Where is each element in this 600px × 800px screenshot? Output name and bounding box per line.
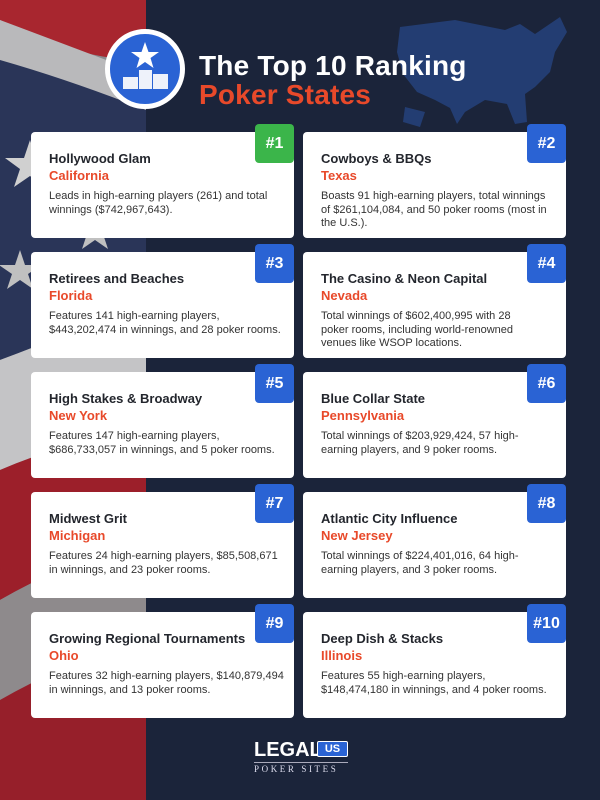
card 2: Texas: [321, 168, 357, 183]
title: The Top 10 Ranking: [199, 50, 467, 81]
card 5: $686,733,057 in winnings, and 5 poker rooms.: [49, 444, 275, 456]
card 10: Deep Dish & Stacks: [321, 631, 443, 646]
card 9: Ohio: [49, 648, 79, 663]
card 2: #2: [538, 135, 555, 152]
card 7: Michigan: [49, 528, 105, 543]
card 4: Total winnings of $602,400,995 with 28: [321, 310, 511, 322]
card 5: New York: [49, 408, 107, 423]
card 1: #1: [266, 135, 283, 152]
card 1: Hollywood Glam: [49, 151, 151, 166]
card 10: #10: [533, 615, 560, 632]
card 4: Nevada: [321, 288, 367, 303]
logo: [254, 739, 348, 774]
card 7: #7: [266, 495, 283, 512]
title: Poker States: [199, 79, 371, 110]
card 8: #8: [538, 495, 555, 512]
card 3: #3: [266, 255, 283, 272]
card 1: California: [49, 168, 109, 183]
card 3: [31, 252, 294, 358]
card 7: Features 24 high-earning players, $85,508,671: [49, 550, 278, 562]
logo: US: [325, 743, 340, 755]
card 8: earning players, and 3 poker rooms.: [321, 564, 497, 576]
card 10: $148,474,180 in winnings, and 4 poker rooms.: [321, 684, 547, 696]
card 3: Features 141 high-earning players,: [49, 310, 220, 322]
card 4: The Casino & Neon Capital: [321, 271, 487, 286]
card 8: New Jersey: [321, 528, 393, 543]
card 5: [31, 372, 294, 478]
card 3: Florida: [49, 288, 92, 303]
card 2: Boasts 91 high-earning players, total winnings: [321, 190, 545, 202]
card 5: #5: [266, 375, 283, 392]
card 1: [31, 132, 294, 238]
card 2: [303, 132, 566, 238]
card 10: [303, 612, 566, 718]
card 2: of $261,104,084, and 50 poker rooms (most in: [321, 204, 547, 216]
card 9: [31, 612, 294, 718]
card 9: Features 32 high-earning players, $140,879,494: [49, 670, 284, 682]
card 7: Midwest Grit: [49, 511, 127, 526]
card 6: Total winnings of $203,929,424, 57 high-: [321, 430, 519, 442]
icon: podium star: [105, 29, 185, 109]
logo: LEGAL: [254, 739, 322, 761]
card 9: in winnings, and 13 poker rooms.: [49, 684, 210, 696]
US map: [397, 17, 567, 127]
card 9: #9: [266, 615, 283, 632]
card 7: in winnings, and 23 poker rooms.: [49, 564, 210, 576]
card 1: winnings ($742,967,643).: [49, 204, 173, 216]
card 9: Growing Regional Tournaments: [49, 631, 245, 646]
card 5: Features 147 high-earning players,: [49, 430, 220, 442]
title: [199, 50, 467, 110]
card 6: Blue Collar State: [321, 391, 425, 406]
card 8: [303, 492, 566, 598]
card 2: the U.S.).: [321, 217, 367, 229]
card 4: poker rooms, including world-renowned: [321, 324, 513, 336]
card 6: earning players, and 9 poker rooms.: [321, 444, 497, 456]
card 5: High Stakes & Broadway: [49, 391, 202, 406]
card 6: #6: [538, 375, 555, 392]
card 8: Total winnings of $224,401,016, 64 high-: [321, 550, 519, 562]
card 4: #4: [538, 255, 555, 272]
card 3: $443,202,474 in winnings, and 28 poker rooms.: [49, 324, 281, 336]
card 6: [303, 372, 566, 478]
card 3: Retirees and Beaches: [49, 271, 184, 286]
card 4: venues like WSOP locations.: [321, 337, 462, 349]
card 4: [303, 252, 566, 358]
card 10: Illinois: [321, 648, 362, 663]
card 10: Features 55 high-earning players,: [321, 670, 485, 682]
card 2: Cowboys & BBQs: [321, 151, 432, 166]
background flag: [0, 0, 146, 800]
card 7: [31, 492, 294, 598]
card 1: Leads in high-earning players (261) and total: [49, 190, 267, 202]
logo: POKER SITES: [254, 764, 338, 774]
card 6: Pennsylvania: [321, 408, 404, 423]
card 8: Atlantic City Influence: [321, 511, 458, 526]
